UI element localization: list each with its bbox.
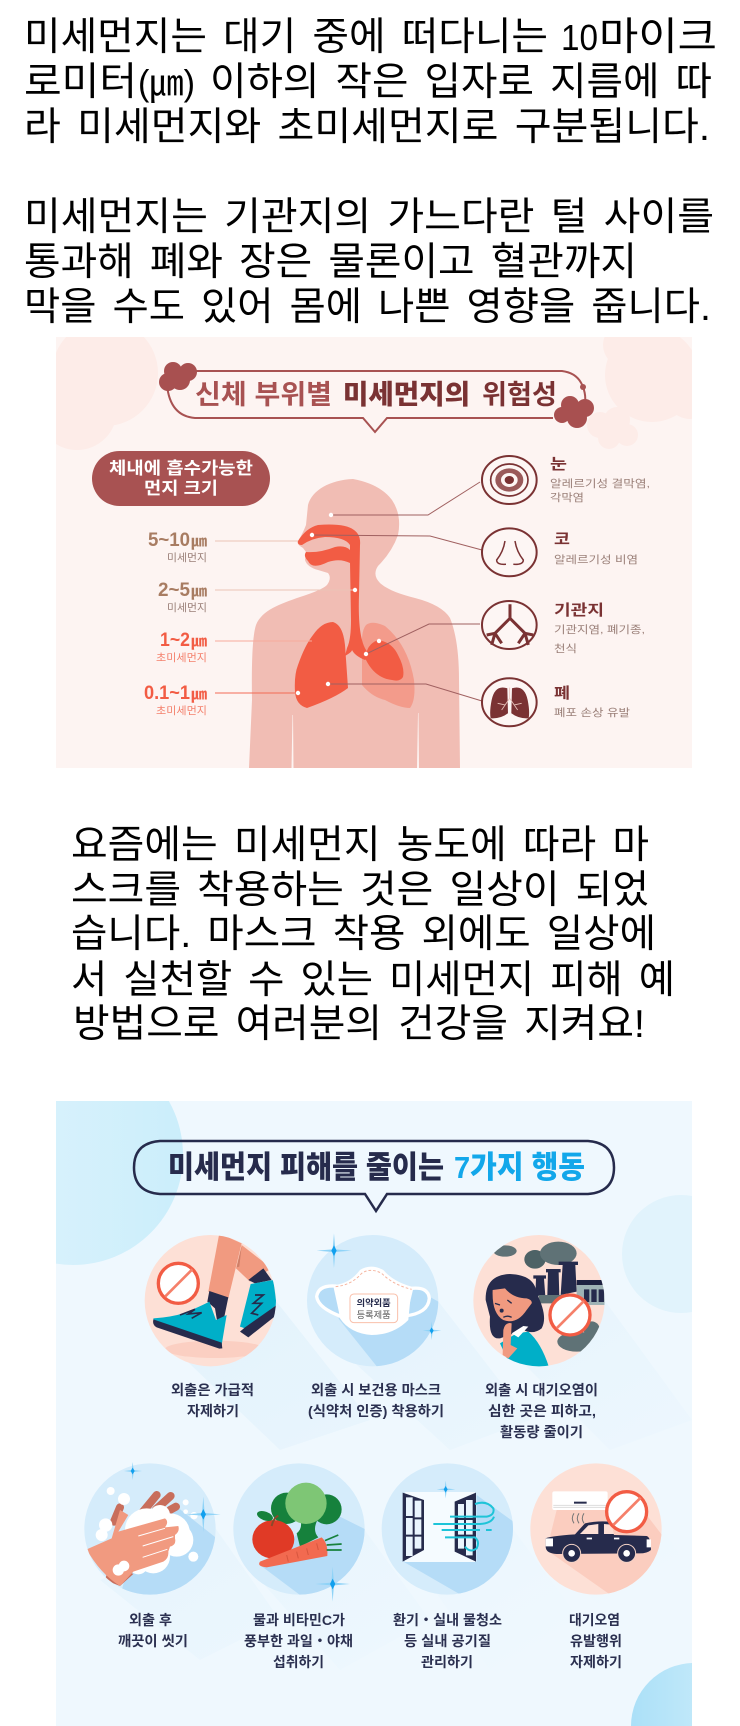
intro paragraph 2: 미세먼지는 기관지의 가느다란 털 사이를 [24, 196, 714, 239]
size labels [144, 530, 207, 717]
middle paragraph: 요즘에는 미세먼지 농도에 따라 마 [71, 824, 649, 867]
caption: action 3: 활동량 줄이기 [500, 1424, 583, 1440]
caption: action 1 [171, 1382, 254, 1419]
middle paragraph: 스크를 착용하는 것은 일상이 되었 [71, 869, 649, 912]
size labels: 미세먼지 [167, 552, 207, 564]
text: lungs: 폐포 손상 유발 [554, 707, 630, 719]
size labels: 0.1~1 [144, 683, 190, 704]
size labels: 초미세먼지 [156, 705, 207, 717]
action 2: mask: 의약외품 [357, 1297, 391, 1308]
heading: body part risk: 미세먼지의 [343, 380, 470, 410]
text: bronchi: 기관지염, 폐기종, [554, 624, 645, 636]
caption: action 1: 외출은 가급적 [171, 1382, 254, 1398]
icon: lungs [482, 678, 537, 726]
action 3: woman and factory [473, 1235, 607, 1368]
size labels: 1~2 [160, 630, 190, 651]
middle paragraph: 서 실천할 수 있는 미세먼지 피해 예 [71, 959, 675, 1002]
text: bronchi [554, 602, 645, 655]
middle paragraph: 방법으로 여러분의 건강을 지켜요! [73, 1003, 645, 1046]
action 1: shoes [145, 1233, 277, 1366]
caption: action 2: 외출 시 보건용 마스크 [311, 1382, 441, 1398]
text: bronchi: 기관지 [554, 602, 604, 619]
action 6: open window [382, 1463, 513, 1597]
pill: inhalable dust size [92, 451, 270, 506]
caption: action 2 [308, 1382, 444, 1419]
pill: inhalable dust size: 체내에 흡수가능한 [109, 459, 253, 478]
panel: seven actions [56, 1101, 692, 1726]
heading: seven actions: 7가지 행동 [454, 1150, 585, 1185]
middle paragraph [71, 824, 675, 1046]
intro paragraph 2: 막을 수도 있어 몸에 나쁜 영향을 줍니다. [24, 286, 711, 329]
intro paragraph 1 [24, 16, 717, 149]
caption: action 7: 대기오염 [569, 1612, 620, 1628]
size labels: ㎛ [191, 533, 207, 551]
text: eye: 각막염 [550, 492, 584, 504]
text: nose: 알레르기성 비염 [554, 554, 638, 566]
caption: action 4: 외출 후 [129, 1612, 172, 1628]
action 7: car and air conditioner [530, 1463, 663, 1597]
intro paragraph 1: 마이크 [599, 16, 717, 59]
intro paragraph 2 [24, 196, 714, 329]
icon: bronchi [482, 601, 537, 649]
size labels: 미세먼지 [167, 602, 207, 614]
intro paragraph 1: 10 [561, 17, 598, 58]
size labels: 5~10 [148, 530, 190, 551]
caption: action 5: 풍부한 과일・야채 [244, 1633, 353, 1649]
heading: seven actions: 미세먼지 피해를 줄이는 [168, 1150, 444, 1185]
text: nose [554, 531, 638, 566]
caption: action 3: 심한 곳은 피하고, [488, 1403, 596, 1419]
heading: body part risk [159, 362, 594, 432]
panel: body part risk [37, 320, 714, 768]
action 4: hand washing [84, 1462, 221, 1597]
caption: action 3 [485, 1382, 598, 1440]
action 5: fruit and vegetables [233, 1463, 367, 1602]
text: nose: 코 [554, 531, 570, 548]
caption: action 1: 자제하기 [187, 1403, 239, 1419]
intro paragraph 1: (㎛) [138, 62, 195, 103]
action 2: mask [307, 1233, 450, 1368]
icon: nose [482, 528, 537, 576]
intro paragraph 1: 미세먼지는 대기 중에 떠다니는 [24, 16, 548, 59]
caption: action 4: 깨끗이 씻기 [118, 1633, 188, 1649]
caption: action 6: 관리하기 [421, 1654, 473, 1670]
icon: eye [482, 456, 537, 504]
intro paragraph 1: 로미터 [24, 61, 137, 104]
size labels: ㎛ [191, 686, 207, 704]
caption: action 6 [393, 1612, 502, 1670]
size labels: ㎛ [191, 583, 207, 601]
caption: action 5: 섭취하기 [273, 1654, 324, 1670]
caption: action 7: 유발행위 [570, 1633, 622, 1649]
text: eye: 눈 [550, 456, 567, 473]
text: eye [550, 456, 650, 504]
body illustration [249, 479, 460, 768]
caption: action 7 [569, 1612, 622, 1670]
intro paragraph 1: 라 미세먼지와 초미세먼지로 구분됩니다. [24, 106, 710, 149]
text: lungs [554, 685, 630, 719]
size labels: ㎛ [191, 633, 207, 651]
action 2: mask: 등록제품 [357, 1310, 391, 1320]
caption: action 5: 물과 비타민C가 [253, 1612, 345, 1628]
text: bronchi: 천식 [554, 643, 577, 655]
pill: inhalable dust size: 먼지 크기 [144, 479, 218, 498]
middle paragraph: 습니다. 마스크 착용 외에도 일상에 [71, 913, 656, 956]
caption: action 2: (식약처 인증) 착용하기 [308, 1403, 444, 1419]
connector lines [215, 482, 482, 701]
heading: seven actions [134, 1141, 614, 1211]
size labels: 초미세먼지 [156, 652, 207, 664]
caption: action 6: 환기・실내 물청소 [393, 1612, 502, 1628]
caption: action 7: 자제하기 [570, 1654, 622, 1670]
heading: body part risk: 위험성 [482, 380, 557, 410]
text: lungs: 폐 [554, 685, 570, 702]
caption: action 6: 등 실내 공기질 [404, 1633, 491, 1649]
intro paragraph 1: 이하의 작은 입자로 지름에 따 [210, 61, 712, 104]
size labels: 2~5 [158, 580, 190, 601]
caption: action 3: 외출 시 대기오염이 [485, 1382, 598, 1398]
heading: body part risk: 신체 부위별 [195, 380, 332, 410]
intro paragraph 2: 통과해 폐와 장은 물론이고 혈관까지 [24, 241, 637, 284]
caption: action 4 [118, 1612, 188, 1649]
caption: action 5 [244, 1612, 353, 1670]
text: eye: 알레르기성 결막염, [550, 478, 650, 490]
